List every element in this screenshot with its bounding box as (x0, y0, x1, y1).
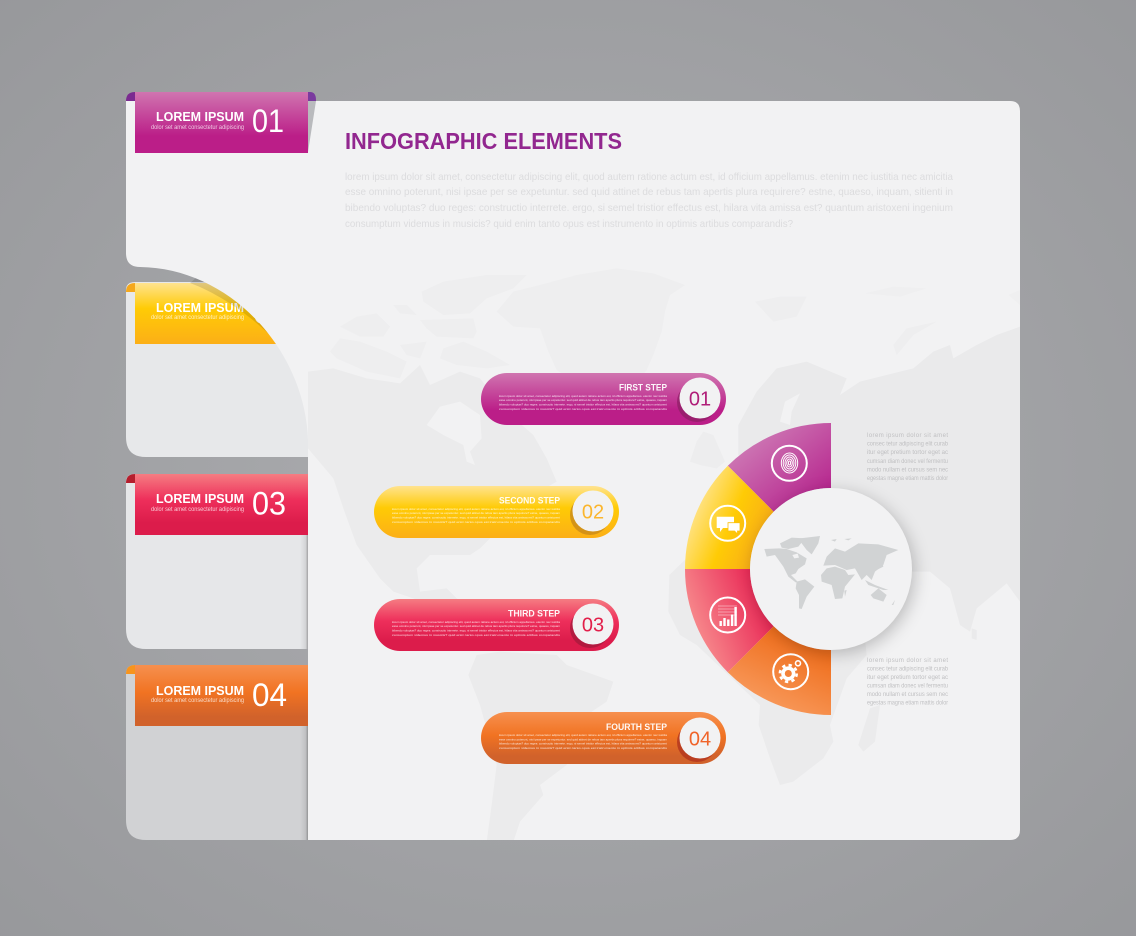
segment: red (685, 569, 774, 672)
intro paragraph: lorem ipsum dolor sit amet, consectetur adipiscing elit, quod autem ratione actum est, id officium appellamus. etenim nec iustitia nec amicitia (345, 171, 953, 183)
number badge 01 (677, 378, 720, 422)
step pill 04 (481, 712, 726, 764)
side note lower (867, 658, 949, 706)
intro paragraph: bibendo voluptas? duo reges: constructio interrete. ergo, si semel tristior effectus est, hilara vita amissa est? quantum aristoxeni ingenium (345, 202, 953, 214)
number badge 02: 02 (582, 502, 604, 524)
side note lower: consec tetur adipiscing elit curab (867, 666, 949, 672)
step heading: FIRST STEP (619, 382, 668, 394)
step body text: bibendo voluptas? duo reges: constructio interrete. ergo, si semel tristior effectus est, hilara vita amissa est? quantum aristoxeni (499, 402, 667, 406)
step body text: consumptum videmus in musicis? quid enim tanto opus est instrumento in optimis artibus comparandis (499, 746, 668, 750)
panel: tab card 04 (126, 665, 308, 840)
side note upper: consec tetur adipiscing elit curab (867, 442, 949, 448)
number badge 01: 01 (689, 388, 711, 410)
banner: lorem ipsum 03: LOREM IPSUM (156, 491, 244, 506)
step body text: esse omnino poterunt, nisi ipsae per se expetuntur. sed quid attinet de rebus tam apertis plura requirere? estne, quaeso, inquam (499, 398, 667, 402)
fold: yellow corner (126, 283, 135, 292)
arctic islands (330, 275, 527, 378)
map: eurasia and africa (668, 287, 1020, 785)
banner: lorem ipsum 03 (135, 474, 308, 535)
british isles (690, 432, 725, 468)
intro paragraph: esse omnino poterunt, nisi ipsae per se expetuntur. sed quid attinet de rebus tam apertis plura requirere? estne, quaeso, inquam, sitienti in (345, 186, 953, 198)
step body text: bibendo voluptas? duo reges: constructio interrete. ergo, si semel tristior effectus est, hilara vita amissa est? quantum aristoxeni (392, 516, 560, 520)
step pill 02 (374, 486, 619, 538)
novaya zemlya (893, 322, 937, 355)
intro paragraph: consumptum videmus in musicis? quid enim tanto opus est instrumento in optimis artibus comparandis? (345, 218, 793, 230)
fold: orange corner (126, 665, 135, 674)
centre disc (750, 488, 912, 650)
segment: purple (728, 423, 831, 512)
number badge 02 (570, 490, 614, 535)
step body text: consumptum videmus in musicis? quid enim tanto opus est instrumento in optimis artibus comparandis (499, 407, 668, 411)
step body text: lorem ipsum dolor sit amet, consectetur adipiscing elit, quod autem ratione actum est, id officium appellamus. etenim nec iustitia (392, 507, 560, 511)
step body text: esse omnino poterunt, nisi ipsae per se expetuntur. sed quid attinet de rebus tam apertis plura requirere? estne, quaeso, inquam (499, 737, 667, 741)
side note lower: modo nullam et cursus sem nec (867, 692, 948, 698)
map: americas and greenland (308, 268, 685, 842)
side note upper: lorem ipsum dolor sit amet (867, 433, 948, 439)
banner: lorem ipsum 01: 01 (252, 103, 284, 139)
mini world map (764, 536, 898, 609)
step pill 03 (374, 599, 619, 651)
side note lower: itur eget pretium tortor eget ac (867, 675, 948, 681)
side note upper: egestas magna etiam mattis dolor (867, 476, 948, 482)
side note lower: lorem ipsum dolor sit amet (867, 658, 948, 664)
banner: lorem ipsum 02: LOREM IPSUM (156, 300, 244, 315)
side note lower: egestas magna etiam mattis dolor (867, 700, 948, 706)
banner: lorem ipsum 02: dolor set amet consectetur adipiscing (151, 314, 244, 321)
fold: red corner (126, 474, 135, 483)
background world map (308, 268, 1020, 842)
banner: lorem ipsum 03: 03 (252, 486, 286, 522)
step body text: lorem ipsum dolor sit amet, consectetur adipiscing elit, quod autem ratione actum est, id officium appellamus. etenim nec iustitia (499, 733, 667, 737)
banner: lorem ipsum 04: dolor set amet consectetur adipiscing (151, 697, 244, 704)
number badge 03: 03 (582, 614, 604, 636)
banner: lorem ipsum 01: dolor set amet consectetur adipiscing (151, 124, 244, 131)
side note lower: cumsan diam donec vel fermentu (867, 684, 948, 690)
step body text: consumptum videmus in musicis? quid enim tanto opus est instrumento in optimis artibus comparandis (392, 633, 561, 637)
taimyr edge (1008, 290, 1020, 305)
step heading: THIRD STEP (508, 608, 561, 620)
step body text: consumptum videmus in musicis? quid enim tanto opus est instrumento in optimis artibus comparandis (392, 520, 561, 524)
step pill 01 (481, 373, 726, 425)
arc shadow on yellow banner (190, 278, 283, 344)
panel: tab card 02 (126, 282, 308, 457)
banner: lorem ipsum 02 (135, 283, 308, 344)
step body text (392, 507, 561, 524)
eurasia (738, 327, 1020, 632)
step body text: lorem ipsum dolor sit amet, consectetur adipiscing elit, quod autem ratione actum est, id officium appellamus. etenim nec iustitia (499, 394, 667, 398)
step body text (499, 394, 668, 411)
banner: lorem ipsum 03: dolor set amet consectetur adipiscing (151, 506, 244, 513)
africa (668, 555, 867, 785)
icon: fingerprint (772, 446, 807, 481)
step body text: esse omnino poterunt, nisi ipsae per se expetuntur. sed quid attinet de rebus tam apertis plura requirere? estne, quaeso, inquam (392, 624, 560, 628)
side note upper: cumsan diam donec vel fermentu (867, 459, 948, 465)
step heading: SECOND STEP (499, 496, 561, 506)
banner: lorem ipsum 04: LOREM IPSUM (156, 683, 244, 698)
number badge 04 (677, 718, 720, 762)
step body text: lorem ipsum dolor sit amet, consectetur adipiscing elit, quod autem ratione actum est, id officium appellamus. etenim nec iustitia (392, 620, 560, 624)
step body text: bibendo voluptas? duo reges: constructio interrete. ergo, si semel tristior effectus est, hilara vita amissa est? quantum aristoxeni (392, 628, 560, 632)
banner: lorem ipsum 01 (126, 92, 316, 153)
banner: lorem ipsum 04 (135, 665, 308, 726)
panel: tab card 03 (126, 474, 308, 649)
segment: yellow (685, 466, 774, 569)
step body text: esse omnino poterunt, nisi ipsae per se expetuntur. sed quid attinet de rebus tam apertis plura requirere? estne, quaeso, inquam (392, 511, 560, 515)
number badge 03 (570, 604, 614, 648)
madagascar (858, 705, 880, 752)
title: INFOGRAPHIC ELEMENTS (345, 128, 622, 154)
segment: orange (728, 626, 831, 715)
banner: lorem ipsum 04: 04 (252, 677, 287, 713)
side note upper: itur eget pretium tortor eget ac (867, 450, 948, 456)
side note upper: modo nullam et cursus sem nec (867, 468, 948, 474)
icon: bar chart (710, 598, 745, 632)
number badge 04: 04 (689, 728, 711, 750)
greenland (497, 268, 685, 388)
step body text (392, 620, 561, 637)
icon: gears (773, 654, 808, 689)
shadow strip (300, 726, 308, 840)
north america (308, 365, 557, 622)
south america (468, 652, 613, 842)
svalbard (755, 297, 807, 322)
sri lanka (972, 628, 977, 640)
banner: lorem ipsum 01: LOREM IPSUM (156, 109, 244, 124)
franz josef land (865, 287, 927, 297)
shadow strip (300, 535, 308, 649)
icon: chat bubbles (710, 506, 745, 541)
step heading: FOURTH STEP (606, 722, 668, 733)
step body text: bibendo voluptas? duo reges: constructio interrete. ergo, si semel tristior effectus est, hilara vita amissa est? quantum aristoxeni (499, 742, 667, 746)
intro paragraph (345, 171, 953, 230)
banner: lorem ipsum 02: 02 (253, 294, 286, 330)
side note upper (867, 433, 949, 482)
semicircle chart (685, 423, 912, 715)
step body text (499, 733, 668, 750)
panel: main content sheet (126, 101, 1020, 840)
